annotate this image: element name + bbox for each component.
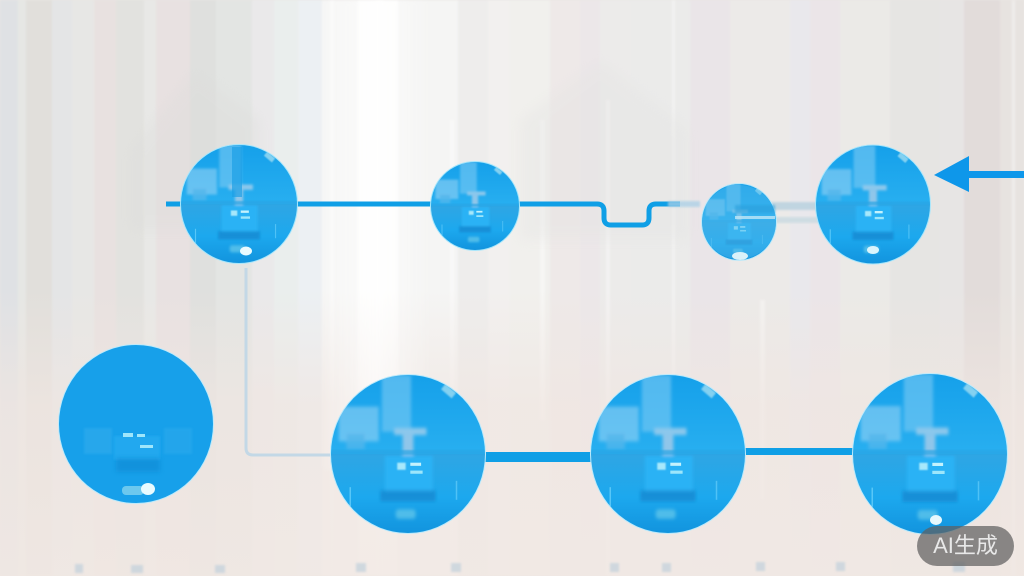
node: top 4: [815, 144, 931, 264]
connector: thin elbow from lower row to first node: [246, 268, 335, 455]
node: lower 4: [852, 373, 1008, 535]
background: faint bottom chips: [75, 562, 965, 573]
badge: AI generated: AI生成: [933, 533, 998, 558]
arrow: entering from right: [934, 156, 1024, 192]
connector: faded link to fourth node: [668, 201, 820, 223]
connector: top line with step: [166, 204, 680, 225]
node: lower 2: [330, 374, 486, 534]
node: lower left solid: [58, 344, 214, 504]
connector: lower row line: [480, 448, 857, 462]
node: top 2: [430, 161, 520, 251]
badge: AI generated: [917, 526, 1014, 566]
node: top 3 (small globe): [701, 183, 777, 261]
node: lower 3: [590, 374, 746, 534]
node: top 1: [180, 144, 298, 264]
